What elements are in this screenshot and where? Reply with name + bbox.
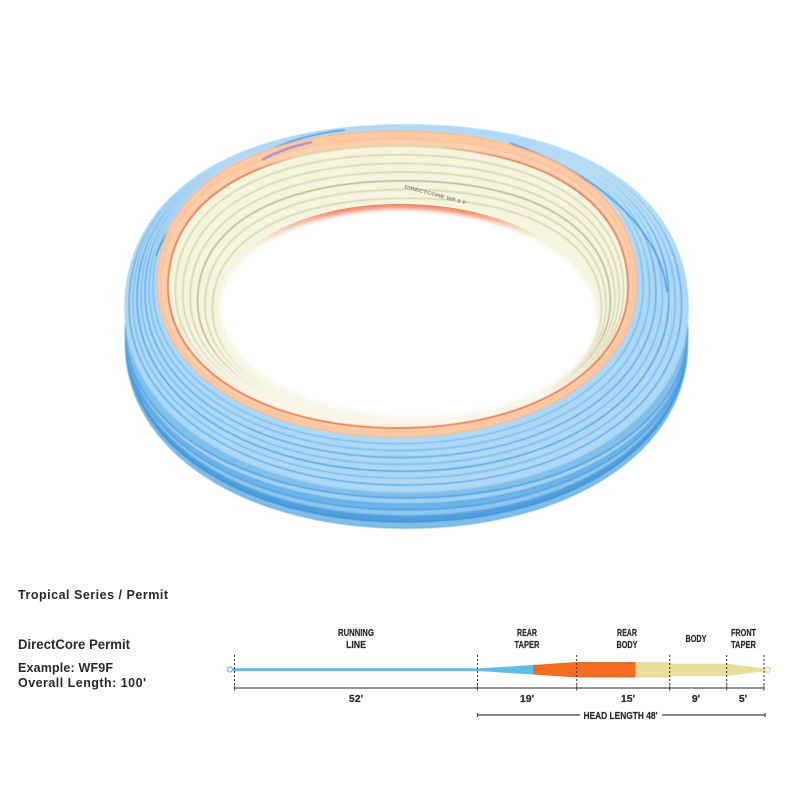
section labels	[338, 628, 757, 651]
length values: 5'	[739, 693, 747, 705]
orange edge line	[168, 146, 628, 428]
rear taper blue	[477, 665, 533, 674]
pale highlight on upper blue coils	[136, 124, 674, 258]
cream coils	[168, 146, 628, 428]
section labels: FRONT	[731, 628, 756, 639]
purple shadow strand	[262, 142, 312, 160]
taper diagram	[228, 628, 770, 722]
photo: coiled fly line	[125, 125, 688, 528]
specs text: Example: WF9F	[18, 661, 113, 675]
length values: 19'	[520, 693, 534, 705]
section labels: BODY	[616, 640, 638, 651]
rear loop	[228, 667, 232, 672]
section labels: LINE	[346, 640, 366, 651]
length values	[349, 693, 747, 705]
length values: 52'	[349, 693, 363, 705]
rear taper and body orange	[533, 662, 636, 678]
lower blue coil stack	[126, 160, 688, 528]
section labels: RUNNING	[338, 628, 374, 639]
top blue coil strands	[125, 125, 688, 492]
section labels: TAPER	[514, 640, 540, 651]
dotted section markers	[234, 655, 764, 686]
length values: 9'	[692, 693, 700, 705]
product name: DirectCore Permit	[18, 637, 130, 652]
pale lower cream coils	[190, 337, 608, 428]
head length bracket: HEAD LENGTH 48'	[584, 711, 658, 722]
white hole	[216, 202, 601, 424]
section labels: REAR	[617, 628, 638, 639]
section labels: TAPER	[731, 640, 757, 651]
section labels: BODY	[686, 634, 707, 645]
peach running line coils	[157, 131, 637, 437]
coil centre opening	[216, 197, 601, 424]
specs text: Overall Length: 100'	[18, 676, 146, 690]
dark blue strand highlights	[156, 130, 667, 292]
front loop	[765, 667, 770, 672]
heading: series: Tropical Series / Permit	[18, 588, 169, 602]
specs text	[18, 661, 146, 690]
salmon underside of coil	[256, 204, 535, 246]
fly line profile	[228, 662, 770, 678]
head length bracket	[478, 711, 765, 722]
rear body and body cream	[636, 662, 764, 678]
length dimension line	[234, 686, 764, 690]
line printing on coil: DIRECTCORE WF 9 F	[403, 184, 467, 206]
length values: 15'	[621, 693, 635, 705]
section labels: REAR	[517, 628, 538, 639]
running line	[233, 668, 478, 671]
